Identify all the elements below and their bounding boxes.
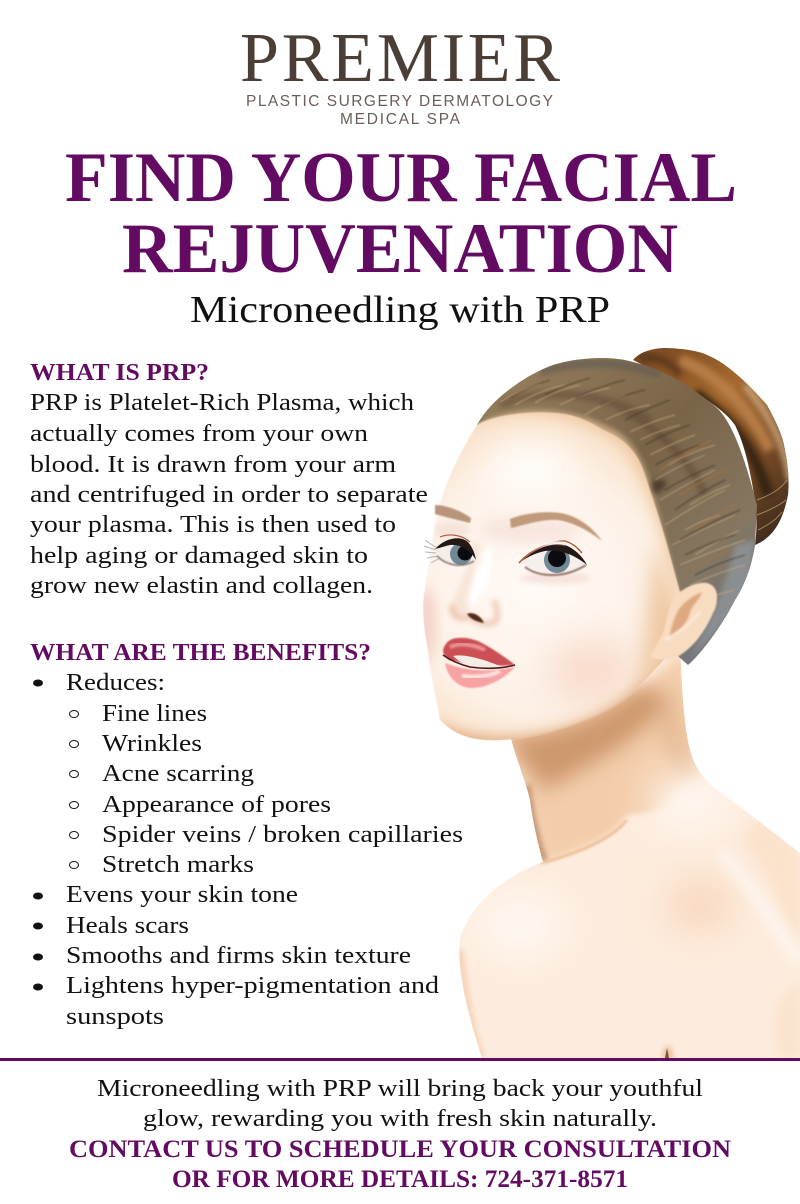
- nose: [452, 600, 497, 624]
- section: benefits: Acne scarring: [102, 761, 254, 787]
- call to action: [69, 1136, 731, 1193]
- section: benefits: Wrinkles: [102, 731, 202, 757]
- section: what is PRP: [30, 360, 428, 599]
- section: benefits: [30, 640, 463, 1030]
- section: benefits: Evens your skin tone: [66, 882, 298, 908]
- hair: [477, 358, 757, 665]
- section: benefits: WHAT ARE THE BENEFITS?: [30, 640, 371, 666]
- face: [423, 412, 680, 741]
- section: benefits: Reduces:: [66, 670, 165, 696]
- footer message: [97, 1076, 703, 1132]
- logo: PLASTIC SURGERY DERMATOLOGY: [246, 93, 553, 110]
- section: what is PRP: WHAT IS PRP?: [30, 360, 209, 386]
- title: REJUVENATION: [122, 210, 678, 288]
- section: what is PRP: PRP is Platelet-Rich Plasma, which: [30, 390, 414, 416]
- footer message: glow, rewarding you with fresh skin naturally.: [143, 1106, 657, 1132]
- section: benefits: Smooths and firms skin texture: [66, 943, 411, 969]
- logo: MEDICAL SPA: [340, 111, 461, 128]
- call to action: OR FOR MORE DETAILS: 724-371-8571: [172, 1166, 628, 1193]
- hair bun: [633, 348, 790, 545]
- section: what is PRP: actually comes from your own: [30, 421, 368, 447]
- section: benefits: Spider veins / broken capillaries: [102, 822, 463, 848]
- section: benefits: Lightens hyper-pigmentation and: [66, 973, 439, 999]
- left eye: [424, 535, 476, 565]
- section: what is PRP: help aging or damaged skin to: [30, 543, 368, 569]
- section: benefits: Appearance of pores: [102, 792, 331, 818]
- section: benefits: Fine lines: [102, 701, 207, 727]
- section: benefits: Heals scars: [66, 913, 189, 939]
- section: what is PRP: blood. It is drawn from your arm: [30, 452, 396, 478]
- ear: [650, 583, 717, 659]
- right eye: [519, 541, 587, 575]
- photo: woman portrait: [416, 348, 800, 1058]
- title: [65, 139, 737, 288]
- section: what is PRP: and centrifuged in order to separate: [30, 482, 428, 508]
- shoulders and neck: [455, 640, 800, 1058]
- eyebrows: [435, 505, 602, 541]
- section: what is PRP: your plasma. This is then used to: [30, 512, 396, 538]
- logo: PREMIER: [240, 20, 560, 97]
- footer message: Microneedling with PRP will bring back your youthful: [97, 1076, 703, 1102]
- lips: [443, 638, 515, 688]
- section: what is PRP: grow new elastin and collagen.: [30, 573, 373, 599]
- subtitle: Microneedling with PRP: [190, 289, 610, 331]
- call to action: CONTACT US TO SCHEDULE YOUR CONSULTATION: [69, 1136, 731, 1163]
- section: benefits: sunspots: [66, 1004, 164, 1030]
- section: benefits: Stretch marks: [102, 852, 254, 878]
- title: FIND YOUR FACIAL: [65, 139, 737, 217]
